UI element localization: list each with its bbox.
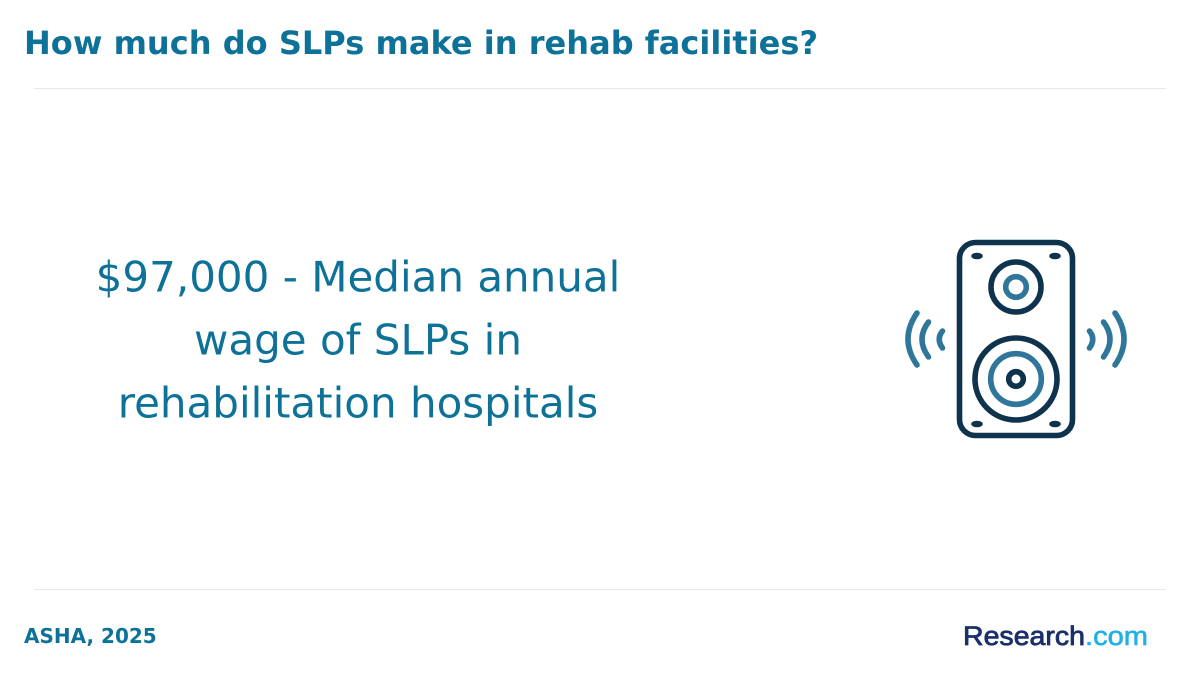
- logo: Research.com: Research: [963, 621, 1085, 651]
- main statistic text: rehabilitation hospitals: [118, 378, 598, 428]
- source: ASHA, 2025: [24, 624, 157, 648]
- icon: speaker with sound waves: [905, 240, 1127, 438]
- title: How much do SLPs make in rehab facilities?: [24, 24, 818, 62]
- main statistic text: wage of SLPs in: [194, 316, 522, 364]
- logo: Research.com: .com: [1085, 621, 1148, 651]
- main statistic text: [96, 252, 620, 428]
- main statistic text: $97,000 - Median annual: [96, 252, 620, 302]
- logo: Research.com: [963, 621, 1148, 651]
